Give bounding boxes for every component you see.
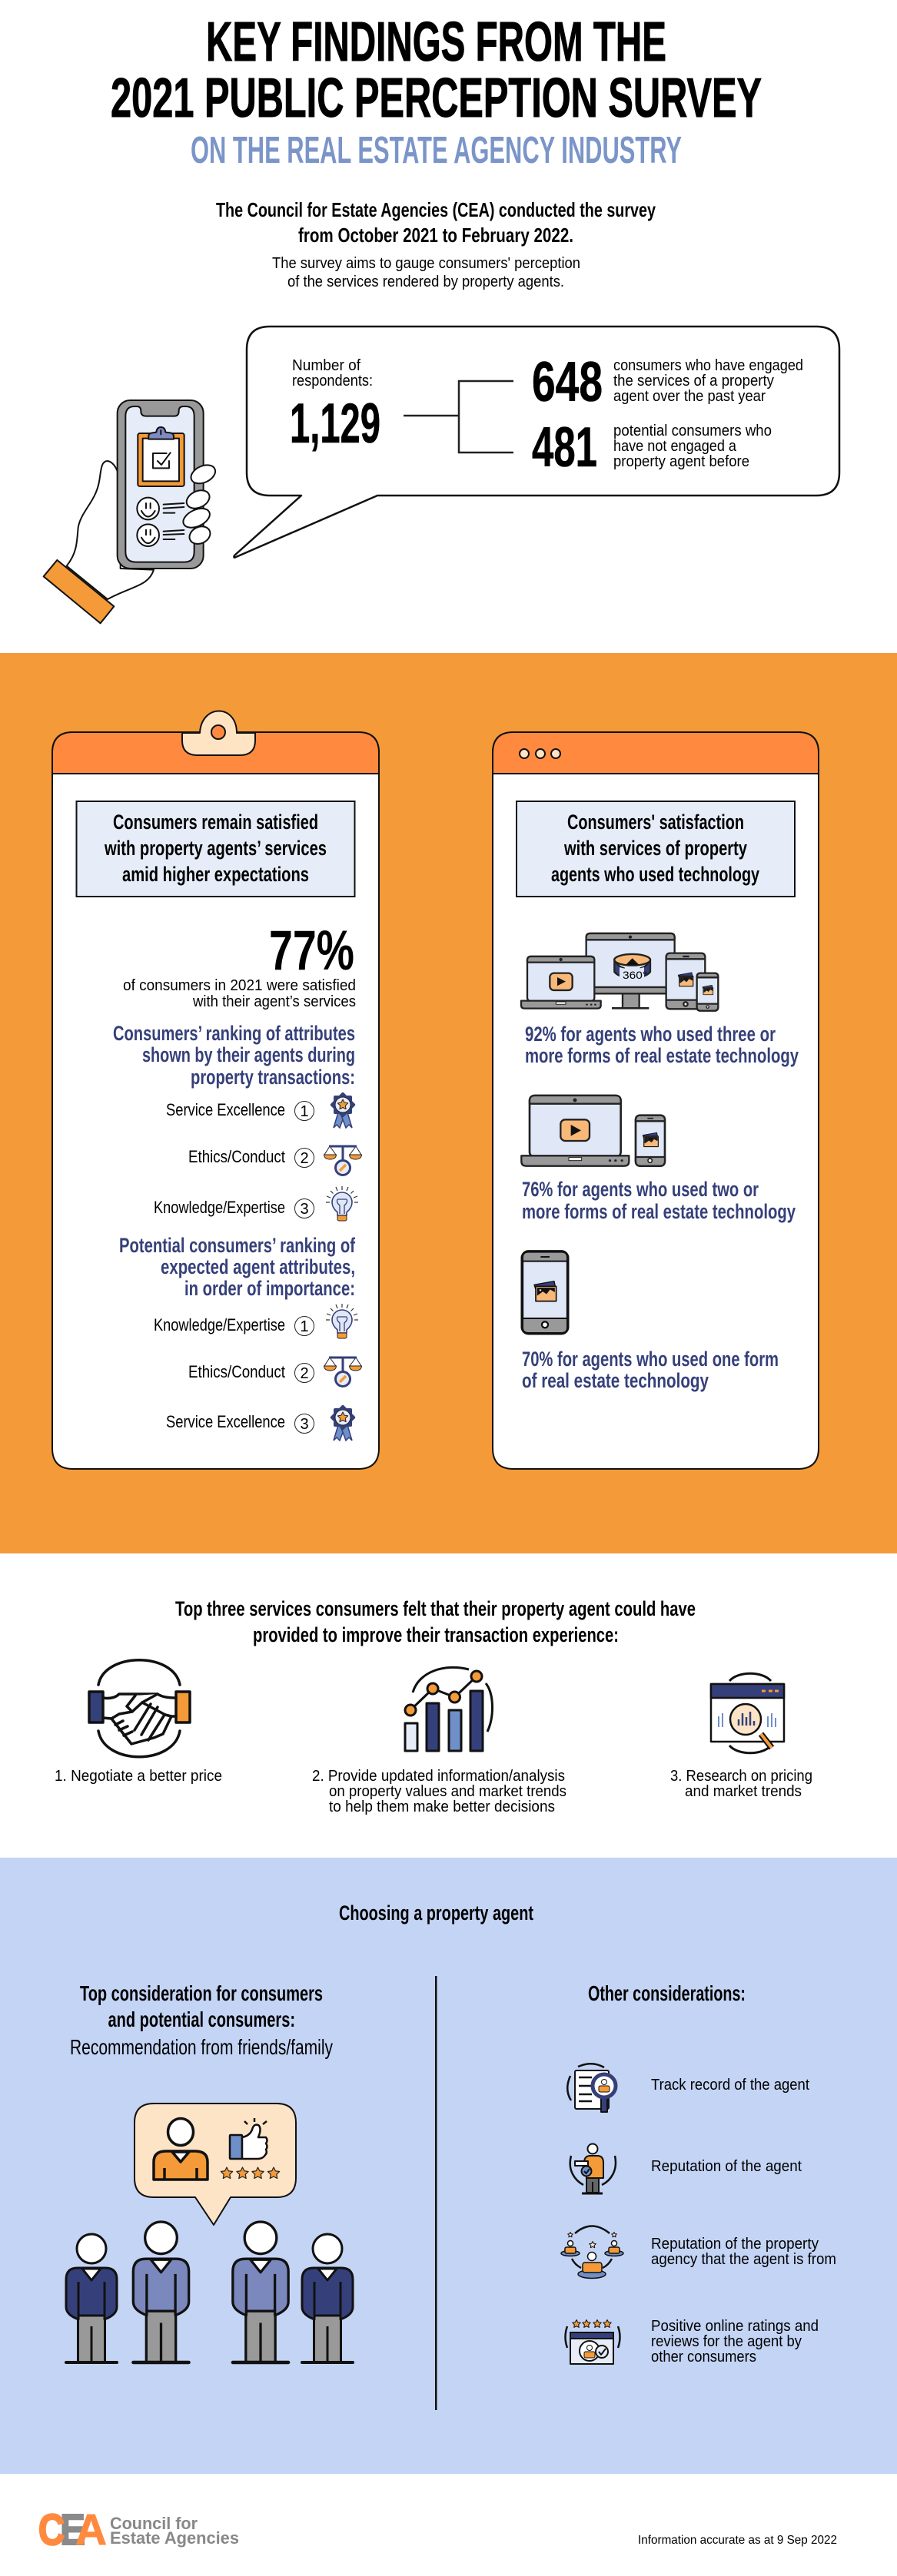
consumers ranking heading: Consumers’ ranking of attributes (113, 1022, 355, 1045)
caption: other consumers (651, 2349, 756, 2365)
heading: other considerations: Other considerations: (588, 1981, 746, 2005)
browser body (493, 732, 819, 1469)
service 1 (55, 1660, 222, 1785)
heading: choosing a property agent: Choosing a property agent (339, 1901, 533, 1925)
heading box: amid higher expectations (122, 863, 309, 886)
icon: thumbs up (230, 2118, 267, 2159)
caption: and market trends (685, 1783, 802, 1800)
rank row: service excellence 1 (166, 1092, 356, 1128)
potential consumers ranking heading (119, 1234, 356, 1300)
caption (651, 2236, 836, 2268)
heading box: agents who used technology (551, 863, 759, 886)
heading box: with services of property (563, 837, 747, 860)
stat: 648 (532, 351, 803, 413)
service 3 (670, 1673, 812, 1800)
stat: 481: potential consumers who (613, 423, 772, 439)
service 2 (312, 1667, 566, 1815)
rank row: service excellence 1: 1 (300, 1103, 309, 1120)
caption: 70%: 70% for agents who used one form (522, 1348, 779, 1371)
title (111, 11, 762, 129)
clipboard clip (182, 711, 255, 755)
divider (435, 1976, 437, 2410)
logo: Council for Estate Agencies: C (38, 2505, 65, 2554)
clipboard header (52, 732, 379, 774)
icon: review window with stars (566, 2320, 620, 2364)
rank row: knowledge 3: 3 (300, 1201, 309, 1218)
intro text bold (216, 198, 656, 247)
rank row: service excellence 3 (166, 1404, 356, 1441)
360 label: 360° (623, 969, 647, 981)
potential consumers ranking heading: expected agent attributes, (161, 1255, 355, 1278)
rank row: ethics 2: 2 (300, 1365, 309, 1382)
caption: Reputation of the property (651, 2236, 819, 2253)
consumers ranking heading (113, 1022, 355, 1089)
potential consumers ranking heading: Potential consumers’ ranking of (119, 1234, 356, 1257)
stat caption: of consumers in 2021 were satisfied (123, 977, 356, 994)
stat: 77%: 77% (269, 920, 354, 982)
intro text bold: The Council for Estate Agencies (CEA) conducted the survey (216, 198, 656, 221)
caption: Reputation of the agent (651, 2158, 802, 2175)
panel: clipboard satisfaction (52, 711, 379, 1469)
people group (66, 2222, 353, 2362)
logo: Council for Estate Agencies (38, 2505, 239, 2554)
stat: 648: the services of a property (613, 373, 774, 390)
caption: 92%: 92% for agents who used three or (525, 1023, 776, 1046)
consideration: online ratings (566, 2318, 819, 2365)
consideration: track record (567, 2064, 809, 2112)
icon: phone (522, 1252, 568, 1334)
heading box: Consumers' satisfaction (567, 811, 744, 834)
browser header (493, 732, 819, 774)
heading: top three services (175, 1597, 696, 1646)
clipboard body (52, 732, 379, 1469)
recommendation speech bubble (135, 2104, 296, 2225)
respondents total: 1,129 (290, 393, 380, 455)
rank row: service excellence 1: Service Excellence (166, 1100, 285, 1119)
stat caption: with their agent’s services (192, 993, 356, 1010)
respondents label: respondents: (292, 373, 373, 390)
stat: 481: 481 (532, 416, 597, 479)
respondents label: Number of (292, 357, 360, 374)
stat caption (123, 977, 356, 1010)
rank row: ethics 2 (188, 1146, 361, 1175)
rank row: ethics 2 (188, 1358, 361, 1386)
heading box (517, 801, 795, 897)
stat: 648: agent over the past year (613, 388, 766, 405)
consumers ranking heading: property transactions: (191, 1066, 355, 1089)
top consideration text (70, 1981, 333, 2059)
respondents label (292, 357, 373, 390)
rank row: service excellence 3: Service Excellence (166, 1412, 285, 1431)
caption (651, 2318, 819, 2365)
consideration: reputation of agency (561, 2226, 836, 2279)
caption: agency that the agent is from (651, 2251, 836, 2268)
logo: Council for Estate Agencies: A (75, 2505, 107, 2554)
caption: Track record of the agent (651, 2077, 809, 2094)
callout: number of respondents (234, 327, 839, 558)
rating stars (221, 2167, 280, 2178)
rank row: knowledge 1: 1 (300, 1318, 309, 1335)
icon: bar chart with trend (405, 1667, 493, 1751)
rank row: ethics 2: 2 (300, 1150, 309, 1167)
stat: 481: have not engaged a (613, 438, 737, 455)
icon: market research window (711, 1673, 784, 1753)
heading: top three services: Top three services consumers felt that their property agent could have (175, 1597, 696, 1620)
consideration: reputation of agent (570, 2143, 802, 2193)
caption: on property values and market trends (329, 1783, 566, 1800)
heading: top three services: provided to improve their transaction experience: (253, 1623, 619, 1646)
stat: 648: consumers who have engaged (613, 357, 803, 374)
caption: 70% (522, 1348, 779, 1392)
heading box (77, 801, 355, 897)
intro text bold: from October 2021 to February 2022. (298, 224, 573, 247)
stat: 481 (532, 416, 772, 479)
caption: 92%: more forms of real estate technology (525, 1044, 799, 1067)
top consideration text: Recommendation from friends/family (70, 2035, 333, 2059)
caption: 76%: 76% for agents who used two or (522, 1178, 759, 1201)
rank row: knowledge 3: Knowledge/Expertise (154, 1198, 285, 1217)
caption: 2. Provide updated information/analysis (312, 1768, 565, 1785)
blue section background (0, 1858, 897, 2474)
title: KEY FINDINGS FROM THE (206, 11, 666, 73)
logo: Council for Estate Agencies: E (60, 2505, 85, 2554)
icon: document and magnifier (567, 2064, 616, 2112)
top consideration text: and potential consumers: (108, 2007, 295, 2031)
heading box: with property agents’ services (104, 837, 327, 860)
clip hole (211, 725, 225, 739)
icon: agent with check badge (570, 2143, 616, 2193)
rank row: ethics 2: Ethics/Conduct (188, 1362, 285, 1381)
connector (404, 381, 513, 453)
logo: Council for Estate Agencies: Council for (110, 2514, 198, 2533)
speech bubble (234, 327, 839, 558)
rank row: knowledge 3 (154, 1186, 358, 1221)
icon: agent (154, 2119, 208, 2180)
rank row: service excellence 3: 3 (300, 1416, 309, 1433)
caption: Positive online ratings and (651, 2318, 819, 2335)
orange section background (0, 653, 897, 1553)
footer note: Information accurate as at 9 Sep 2022 (638, 2534, 837, 2547)
rank row: knowledge 1: Knowledge/Expertise (154, 1315, 285, 1334)
intro text regular (272, 255, 580, 290)
caption (312, 1768, 566, 1815)
consumers ranking heading: shown by their agents during (142, 1043, 355, 1066)
top consideration text: Top consideration for consumers (80, 1981, 323, 2005)
intro text regular: The survey aims to gauge consumers' perception (272, 255, 580, 272)
caption: 70%: of real estate technology (522, 1369, 709, 1392)
heading box: Consumers remain satisfied (113, 811, 318, 834)
panel: browser technology satisfaction (493, 732, 819, 1469)
stat: 481: property agent before (613, 453, 749, 470)
caption: 3. Research on pricing (670, 1768, 812, 1785)
icon: hand holding phone (44, 400, 218, 623)
rank row: ethics 2: Ethics/Conduct (188, 1147, 285, 1166)
stat: 648: 648 (532, 351, 603, 413)
caption: 76% (522, 1178, 796, 1223)
logo: Council for Estate Agencies: Estate Agencies (110, 2528, 239, 2548)
caption: to help them make better decisions (329, 1799, 555, 1815)
caption: 92% (525, 1023, 799, 1067)
icon: laptop and phone (521, 1096, 665, 1166)
caption: reviews for the agent by (651, 2333, 802, 2350)
caption: 76%: more forms of real estate technology (522, 1200, 796, 1223)
browser dots (520, 749, 560, 758)
caption (670, 1768, 812, 1800)
icon: four devices (521, 933, 718, 1011)
caption: 1. Negotiate a better price (55, 1768, 222, 1785)
icon: handshake (89, 1660, 190, 1757)
rank row: knowledge 1 (154, 1304, 358, 1338)
icon: three agents with stars (561, 2226, 623, 2279)
potential consumers ranking heading: in order of importance: (184, 1277, 355, 1300)
intro text regular: of the services rendered by property agents. (287, 274, 564, 290)
